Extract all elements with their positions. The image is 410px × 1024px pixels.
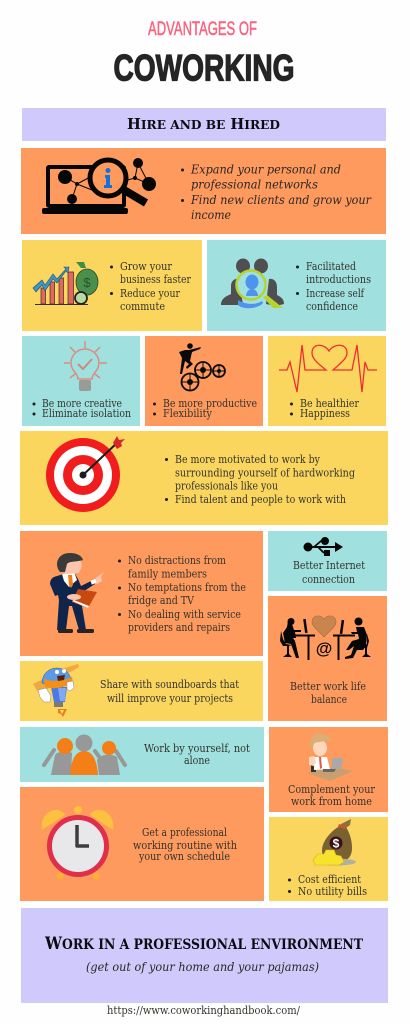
text: internet [293, 558, 365, 586]
icon: mascot rocket [33, 664, 79, 717]
icon: growth chart with money [33, 262, 98, 304]
panel: routine [20, 787, 264, 901]
panel: hire and be hired heading: HIRE AND BE HIRED [127, 115, 280, 133]
text: work life balance: balance [311, 692, 347, 706]
text: routine: your own schedule [138, 849, 230, 863]
text: introductions bullets: confidence [306, 299, 358, 313]
text: creative bullets: Eliminate isolation [42, 406, 131, 420]
text: no distractions bullets: No dealing with service [128, 607, 241, 621]
text: grow bullets [110, 259, 191, 313]
icon: businessman at laptop [307, 733, 353, 781]
text: creative bullets: Be more creative [42, 396, 122, 410]
text: no distractions bullets: family members [128, 566, 207, 580]
text: no distractions bullets: fridge and TV [128, 593, 195, 607]
text: routine [133, 825, 237, 863]
text: healthier bullets [290, 396, 359, 420]
text: introductions bullets [296, 259, 371, 313]
text: work by yourself: Work by yourself, not [144, 741, 250, 755]
text: cost bullets: Cost efficient [298, 872, 361, 886]
text: motivated bullets: Find talent and people to work with [175, 492, 346, 506]
text: healthier bullets: Be healthier [300, 396, 359, 410]
text: complement: work from home [291, 794, 372, 808]
panel: networks [21, 148, 386, 234]
text: work by yourself [144, 741, 250, 767]
text: productive bullets: Be more productive [163, 396, 257, 410]
icon: couple at desks with heart: @ [316, 639, 332, 658]
text: networks bullets: income [191, 207, 231, 222]
text: grow bullets: business faster [120, 272, 191, 286]
panel: no distractions [20, 531, 263, 656]
text: no distractions bullets [118, 553, 246, 634]
text: introductions bullets: Increase self [306, 286, 365, 300]
panel: work life balance [268, 596, 387, 721]
text: networks bullets: professional networks [191, 176, 318, 192]
text: networks bullets: Expand your personal and [190, 162, 341, 176]
text: motivated bullets [165, 452, 356, 506]
panel: productive [145, 336, 263, 426]
panel: work by yourself [20, 727, 264, 782]
panel: professional environment [21, 908, 388, 1003]
panel: healthier [268, 336, 386, 426]
text: healthier bullets: Happiness [300, 406, 350, 420]
text: networks bullets: Find new clients and grow your [190, 192, 372, 207]
text: soundboards: will improve your projects [107, 691, 233, 705]
icon: usb symbol [304, 537, 343, 556]
icon: presenter man [50, 553, 104, 633]
panel: soundboards [20, 661, 263, 721]
text: pajamas note: (get out of your home and your pajamas) [86, 959, 319, 974]
text: motivated bullets: surrounding yourself of hardworking [175, 466, 356, 480]
text: cost bullets [288, 872, 367, 898]
icon: laptop with magnifier [42, 158, 156, 214]
panel: creative [22, 336, 140, 426]
icon: group of three people [44, 734, 125, 775]
text: networks bullets [181, 162, 372, 222]
text: no distractions bullets: No distractions from [128, 553, 226, 567]
icon: people with magnifier [221, 258, 284, 308]
title: coworking: COWORKING [114, 48, 294, 88]
text: productive bullets: Flexibility [163, 406, 212, 420]
text: soundboards: Share with soundboards that [100, 677, 239, 691]
icon: growth chart with money: $ [83, 275, 91, 290]
icon: light bulb [64, 341, 107, 391]
title: advantages of: ADVANTAGES OF [148, 18, 257, 40]
text: motivated bullets: Be more motivated to work by [175, 452, 320, 466]
panel: complement work from home [269, 727, 388, 812]
panel: cost efficient [269, 817, 388, 901]
icon: heartbeat heart [279, 345, 377, 392]
text: introductions bullets: Facilitated [306, 259, 357, 273]
text: introductions bullets: introductions [306, 272, 371, 286]
text: motivated bullets: professionals like you [175, 478, 278, 492]
text: productive bullets [153, 396, 257, 420]
text: complement: Complement your [288, 782, 375, 796]
icon: alarm clock [42, 806, 113, 880]
text: soundboards [100, 677, 239, 705]
text: routine: working routine with [133, 838, 237, 852]
text: creative bullets [32, 396, 131, 420]
text: work life balance [290, 679, 366, 706]
text: grow bullets: Reduce your [120, 286, 180, 300]
panel: grow business [22, 240, 202, 331]
text: no distractions bullets: No temptations from the [128, 580, 246, 594]
text: grow bullets: Grow your [120, 259, 172, 273]
text: complement [288, 782, 375, 808]
icon: runner on gears [179, 343, 225, 391]
text: work life balance: Better work life [290, 679, 366, 693]
text: work by yourself: alone [184, 753, 210, 767]
icon: money bag and gold: $ [333, 836, 340, 850]
source url: https://www.coworkinghandbook.com/ [107, 1003, 300, 1017]
text: routine: Get a professional [142, 825, 227, 839]
panel: motivated [20, 431, 388, 525]
text: no distractions bullets: providers and repairs [128, 620, 230, 634]
icon: target with arrow [46, 436, 125, 512]
text: internet: Better Internet [293, 558, 365, 572]
panel: hire and be hired heading [22, 108, 386, 141]
heading: work in a professional environment: WORK IN A PROFESSIONAL ENVIRONMENT [44, 934, 363, 953]
text: internet: connection [302, 572, 355, 586]
text: grow bullets: commute [120, 299, 165, 313]
panel: introductions [207, 240, 386, 331]
panel: internet [268, 531, 387, 591]
text: cost bullets: No utility bills [298, 884, 367, 898]
